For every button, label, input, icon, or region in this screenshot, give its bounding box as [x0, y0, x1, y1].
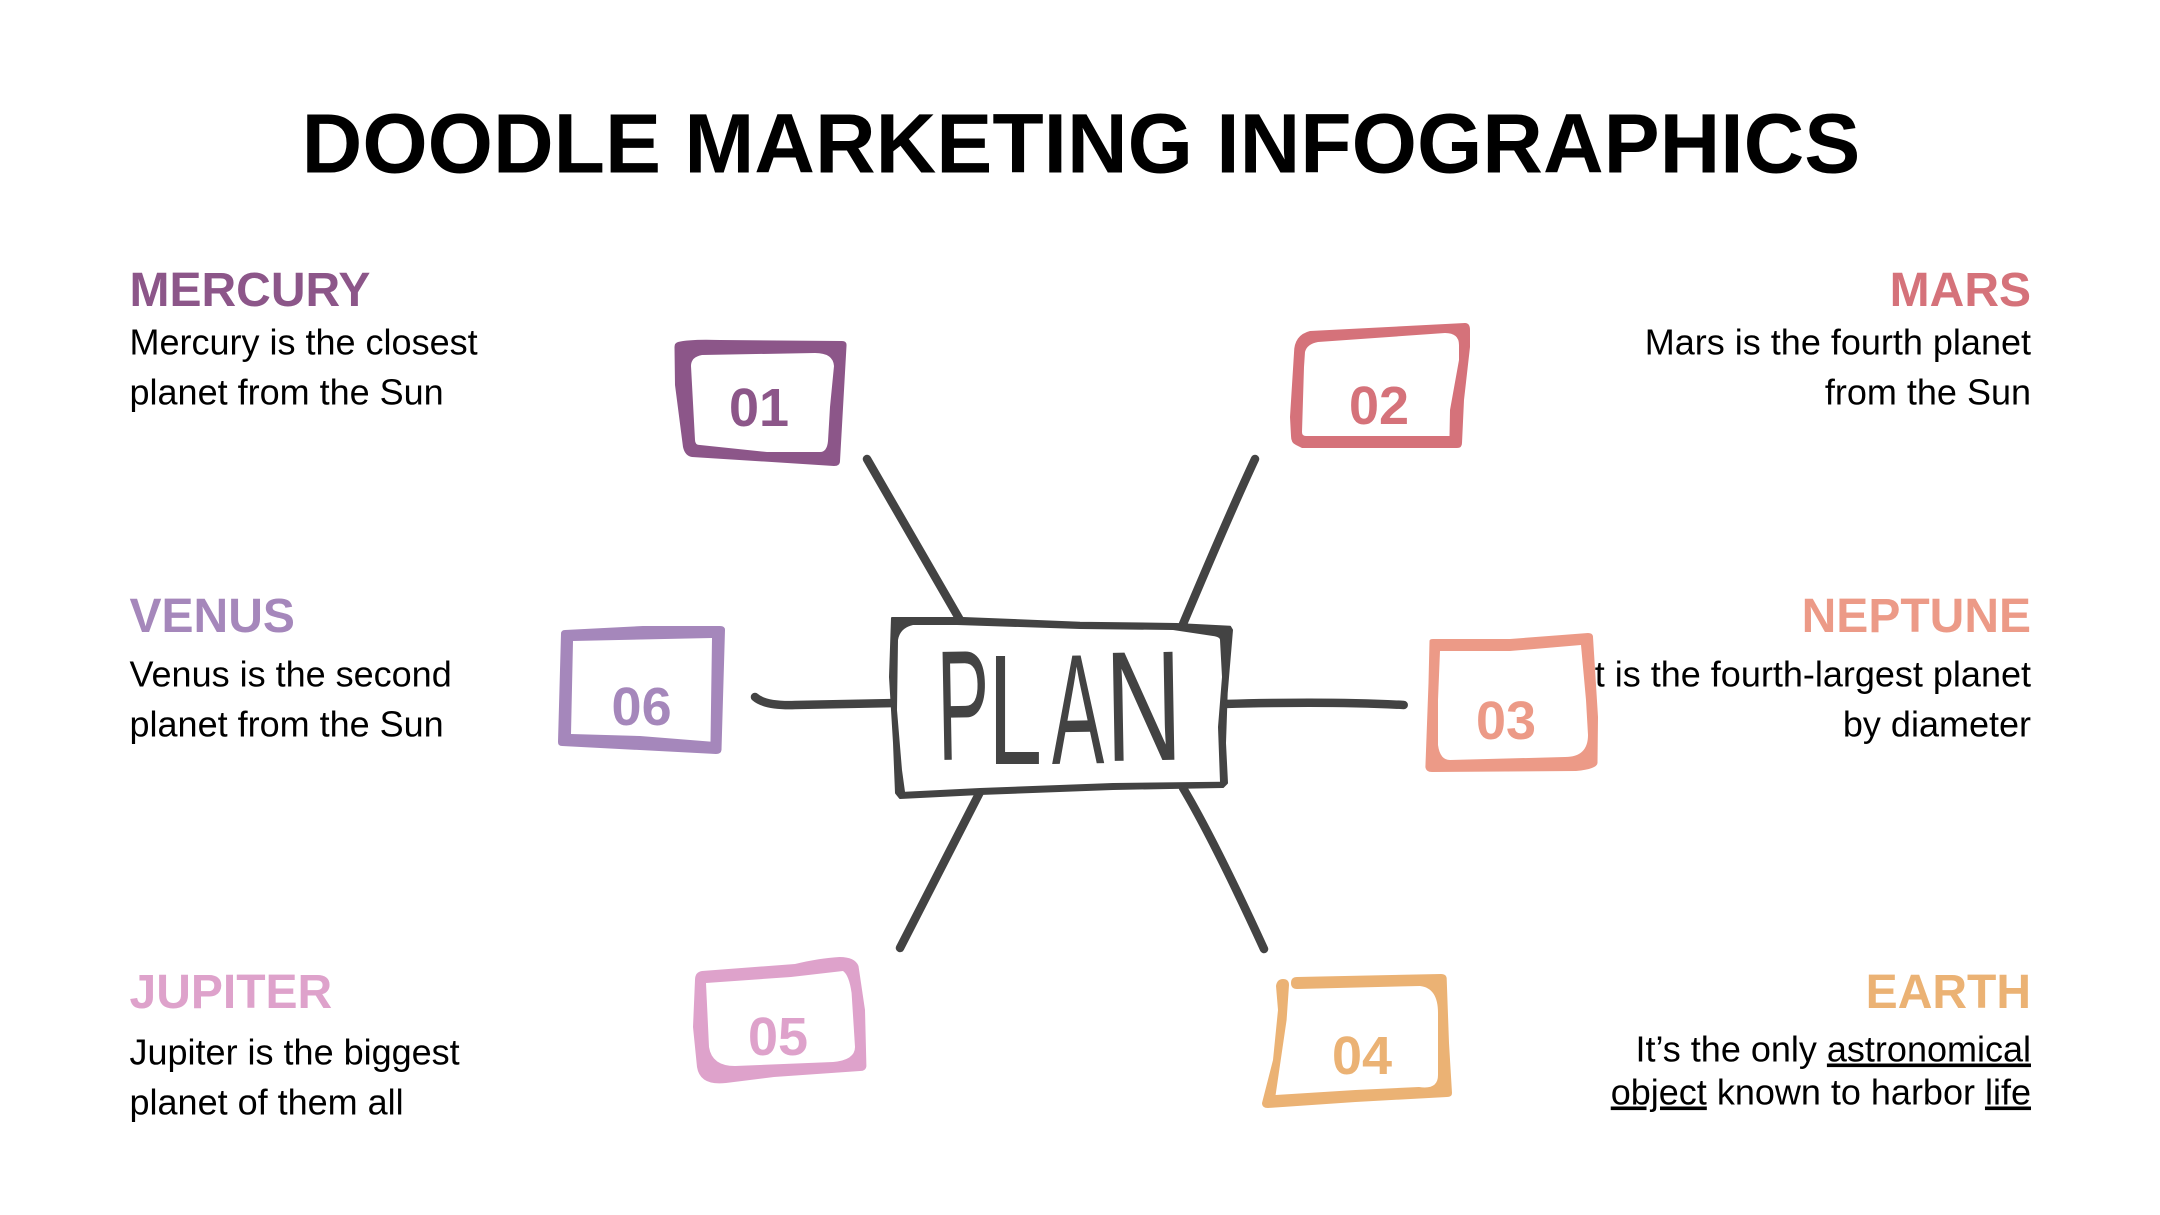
- box 05: [693, 957, 866, 1083]
- central box: plan: [890, 618, 1232, 798]
- heading: mars: MARS: [1890, 264, 2031, 317]
- label: plan: A: [1050, 623, 1105, 798]
- title: DOODLE MARKETING INFOGRAPHICS: [302, 97, 1860, 191]
- label: plan: N: [1104, 618, 1184, 795]
- label: plan: L: [988, 622, 1042, 798]
- arrow: connector to 02: [1180, 459, 1255, 630]
- panel: jupiter text: [130, 966, 460, 1122]
- body: jupiter: planet of them all: [130, 1082, 404, 1122]
- box 01: [674, 340, 847, 466]
- number 06: 06: [612, 677, 672, 737]
- number 02: 02: [1349, 376, 1409, 436]
- number 01: 01: [729, 378, 789, 438]
- body: jupiter: Jupiter is the biggest: [130, 1032, 460, 1072]
- panel: earth text: [1611, 966, 2031, 1112]
- box 02: [1290, 323, 1470, 448]
- panel: mars text: [1645, 264, 2031, 412]
- body: mars: Mars is the fourth planet: [1645, 322, 2031, 362]
- body: mercury: planet from the Sun: [130, 372, 444, 412]
- heading: jupiter: JUPITER: [130, 966, 332, 1019]
- heading: earth: EARTH: [1866, 966, 2031, 1019]
- box 03: [1425, 633, 1598, 772]
- arrow: connector to 05: [900, 792, 980, 948]
- label: plan: P: [936, 619, 991, 794]
- body: neptune: by diameter: [1843, 704, 2031, 744]
- box 04: [1262, 974, 1452, 1108]
- body: earth: object known to harbor life: [1611, 1072, 2031, 1112]
- body: mercury: Mercury is the closest: [130, 322, 478, 362]
- panel: venus text: [130, 590, 452, 744]
- arrow: connector to 04: [1183, 788, 1264, 949]
- number 03: 03: [1476, 691, 1536, 751]
- heading: mercury: MERCURY: [130, 264, 370, 317]
- number 05: 05: [748, 1007, 808, 1067]
- arrow: connector to 06: [755, 697, 894, 705]
- arrow: connector to 01: [867, 459, 960, 620]
- label: plan: [936, 618, 1184, 798]
- heading: neptune: NEPTUNE: [1802, 590, 2031, 643]
- body: earth: It’s the only astronomical: [1635, 1028, 2031, 1070]
- heading: venus: VENUS: [130, 590, 295, 643]
- body: neptune: It is the fourth-largest planet: [1585, 654, 2031, 694]
- panel: neptune text: [1585, 590, 2031, 744]
- panel: mercury text: [130, 264, 478, 412]
- number 04: 04: [1332, 1026, 1392, 1086]
- body: mars: from the Sun: [1825, 372, 2031, 412]
- body: venus: planet from the Sun: [130, 704, 444, 744]
- body: venus: Venus is the second: [130, 654, 452, 694]
- arrow: connector to 03: [1224, 703, 1404, 705]
- box 06: [558, 626, 725, 754]
